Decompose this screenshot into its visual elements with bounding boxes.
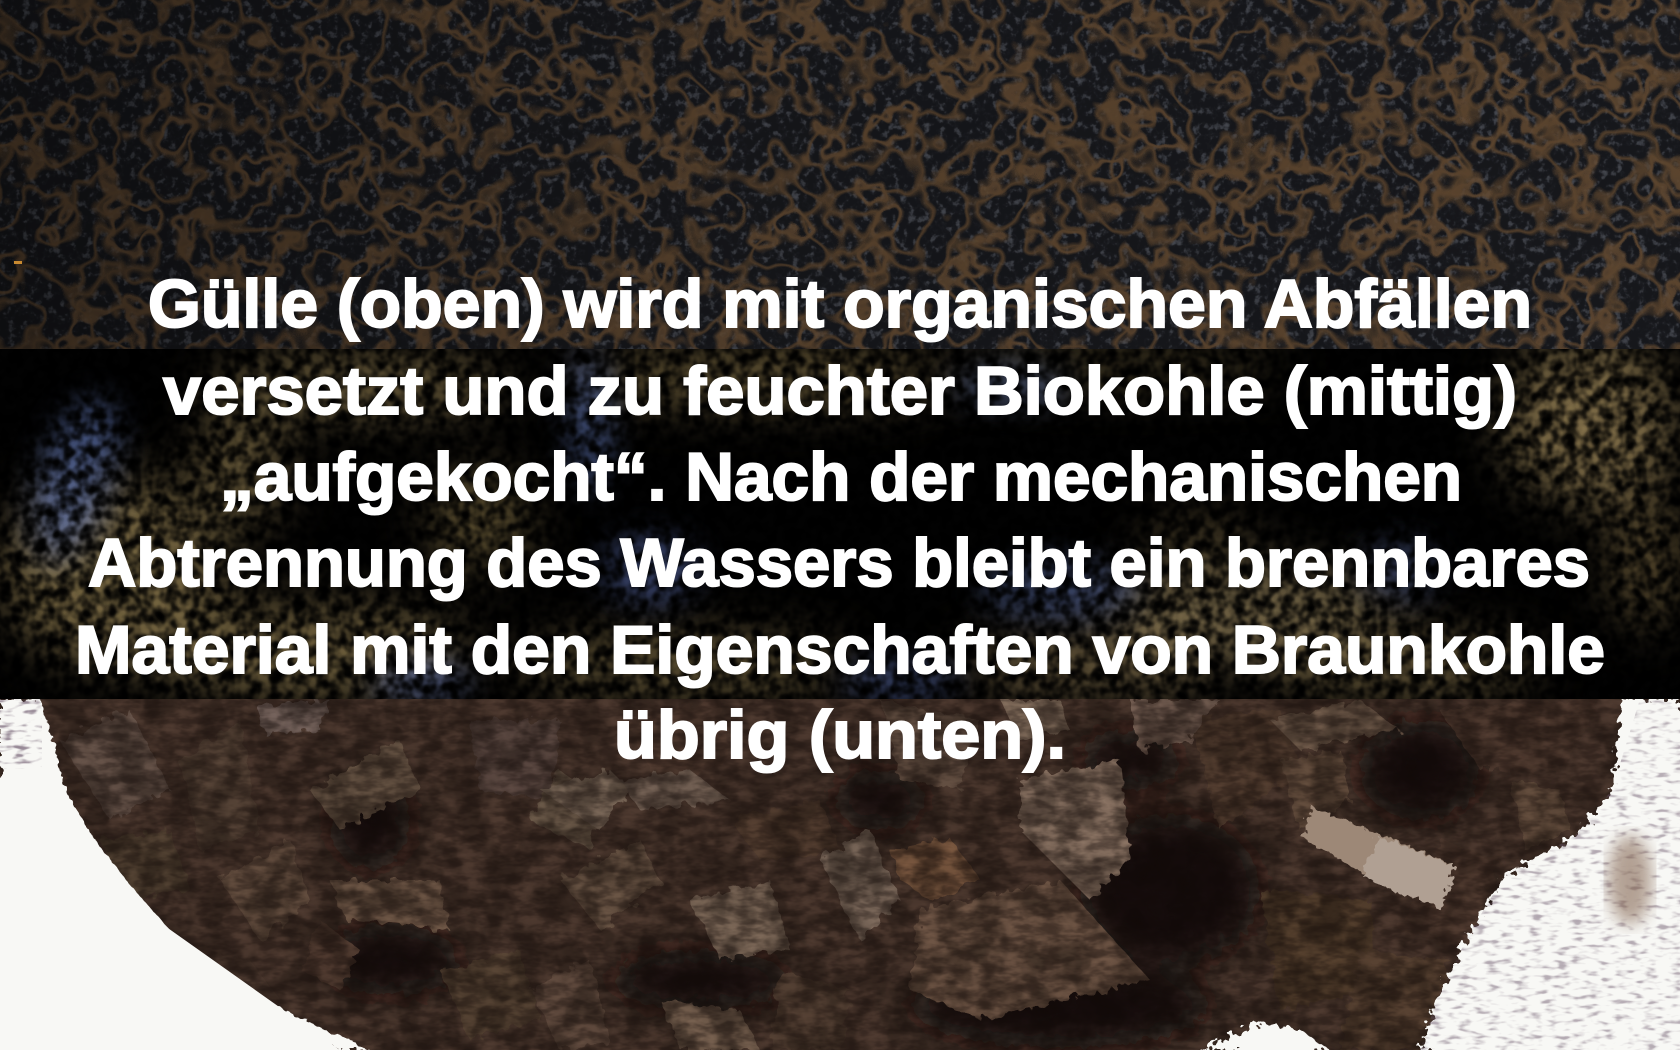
caption line 1: Gülle (oben) wird mit organischen Abfällen (148, 266, 1532, 342)
texture: blotches (0, 699, 1680, 1050)
texture: wood grain (0, 699, 1680, 1050)
photo: slurry (top band) (0, 0, 1680, 349)
caption line 5: Material mit den Eigenschaften von Braunkohle (75, 612, 1605, 688)
caption line 2: versetzt und zu feuchter Biokohle (mittig) (163, 353, 1517, 429)
caption line 6: übrig (unten). (614, 697, 1066, 773)
caption line 4: Abtrennung des Wassers bleibt ein brennbares (88, 525, 1590, 601)
photo: dried brown-coal-like chips on white cloth (bottom band) (0, 699, 1680, 1050)
wood chips (60, 710, 170, 820)
light wood splinter (1302, 806, 1456, 908)
caption line 3: „aufgekocht“. Nach der mechanischen (220, 439, 1462, 515)
white cloth: left and right of the heap (0, 699, 1680, 1050)
caption text (75, 266, 1605, 773)
material heap (0, 699, 1680, 1050)
texture: cloth specks (0, 699, 1680, 1050)
dark shadows (320, 720, 1480, 1047)
photo: wet biochar (middle band) (0, 335, 1680, 699)
